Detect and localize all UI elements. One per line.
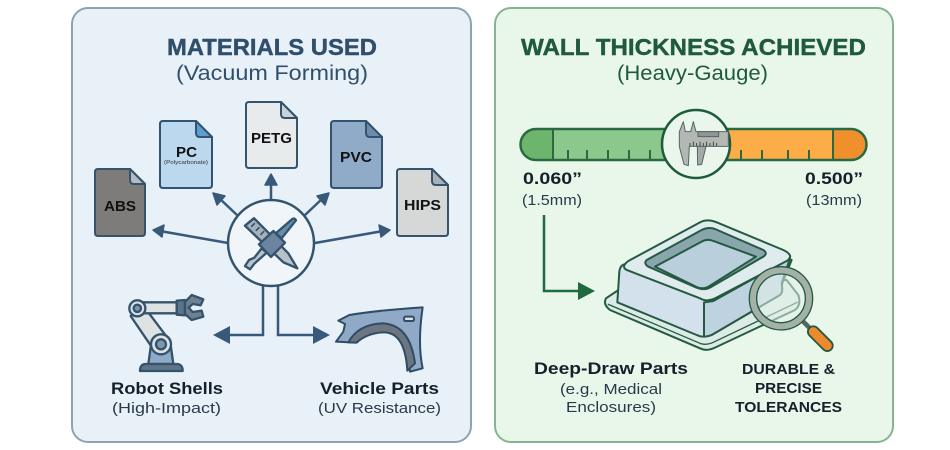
arrow: to deep-draw part [544,215,595,300]
icon: PETG file: PETG [251,130,292,147]
label: deep-draw parts [534,359,688,416]
subheading: heavy-gauge: (Heavy-Gauge) [617,62,768,85]
thickness gauge bar [520,110,866,178]
icon: HIPS file: HIPS [404,197,441,214]
connector arrows to applications [213,285,330,344]
label: vehicle parts: (UV Resistance) [318,400,441,417]
icon: PETG file [246,102,297,168]
icon: central tools circle [228,200,314,286]
label: minimum thickness: 0.060” [523,169,582,188]
icon: PVC file [331,121,382,188]
icon: caliper [662,110,730,178]
label: deep-draw parts: Deep-Draw Parts [534,359,688,378]
icon: ABS file: ABS [104,198,136,215]
icon: robot arm [129,295,203,371]
icon: PVC file: PVC [340,149,372,166]
label: vehicle parts [318,379,441,417]
label: deep-draw parts: Enclosures) [566,399,656,416]
icon: ABS file [95,169,145,236]
panel: materials used [72,8,471,442]
label: deep-draw parts: (e.g., Medical [560,381,662,398]
label: minimum thickness: (1.5mm) [522,192,582,209]
label: vehicle parts: Vehicle Parts [320,379,439,398]
label: minimum thickness [522,169,582,209]
icon: PC file: (Polycarbonate) [164,160,208,166]
heading: materials used: MATERIALS USED [167,34,377,60]
icon: magnifying glass [753,270,827,346]
icon: vehicle fender [336,307,423,372]
label: maximum thickness: 0.500” [805,169,863,188]
icon: HIPS file [397,169,448,236]
panel: wall thickness achieved [495,8,893,442]
label: durable and precise tolerances: DURABLE & [742,361,835,378]
icon: PC file: PC [176,144,197,161]
label: robot shells [111,379,223,417]
icon: deep-draw tray with magnifier [605,220,827,350]
arrows to materials [153,174,390,243]
label: robot shells: (High-Impact) [112,400,221,417]
label: maximum thickness [805,169,863,209]
label: durable and precise tolerances: PRECISE [755,380,822,397]
subheading: vacuum forming: (Vacuum Forming) [176,62,368,85]
label: robot shells: Robot Shells [111,379,223,398]
label: durable and precise tolerances: TOLERANCES [735,399,842,416]
icon: PC file [160,121,212,188]
label: maximum thickness: (13mm) [806,192,862,209]
heading: wall thickness achieved: WALL THICKNESS ACHIEVED [521,34,866,60]
label: durable and precise tolerances [735,361,842,416]
